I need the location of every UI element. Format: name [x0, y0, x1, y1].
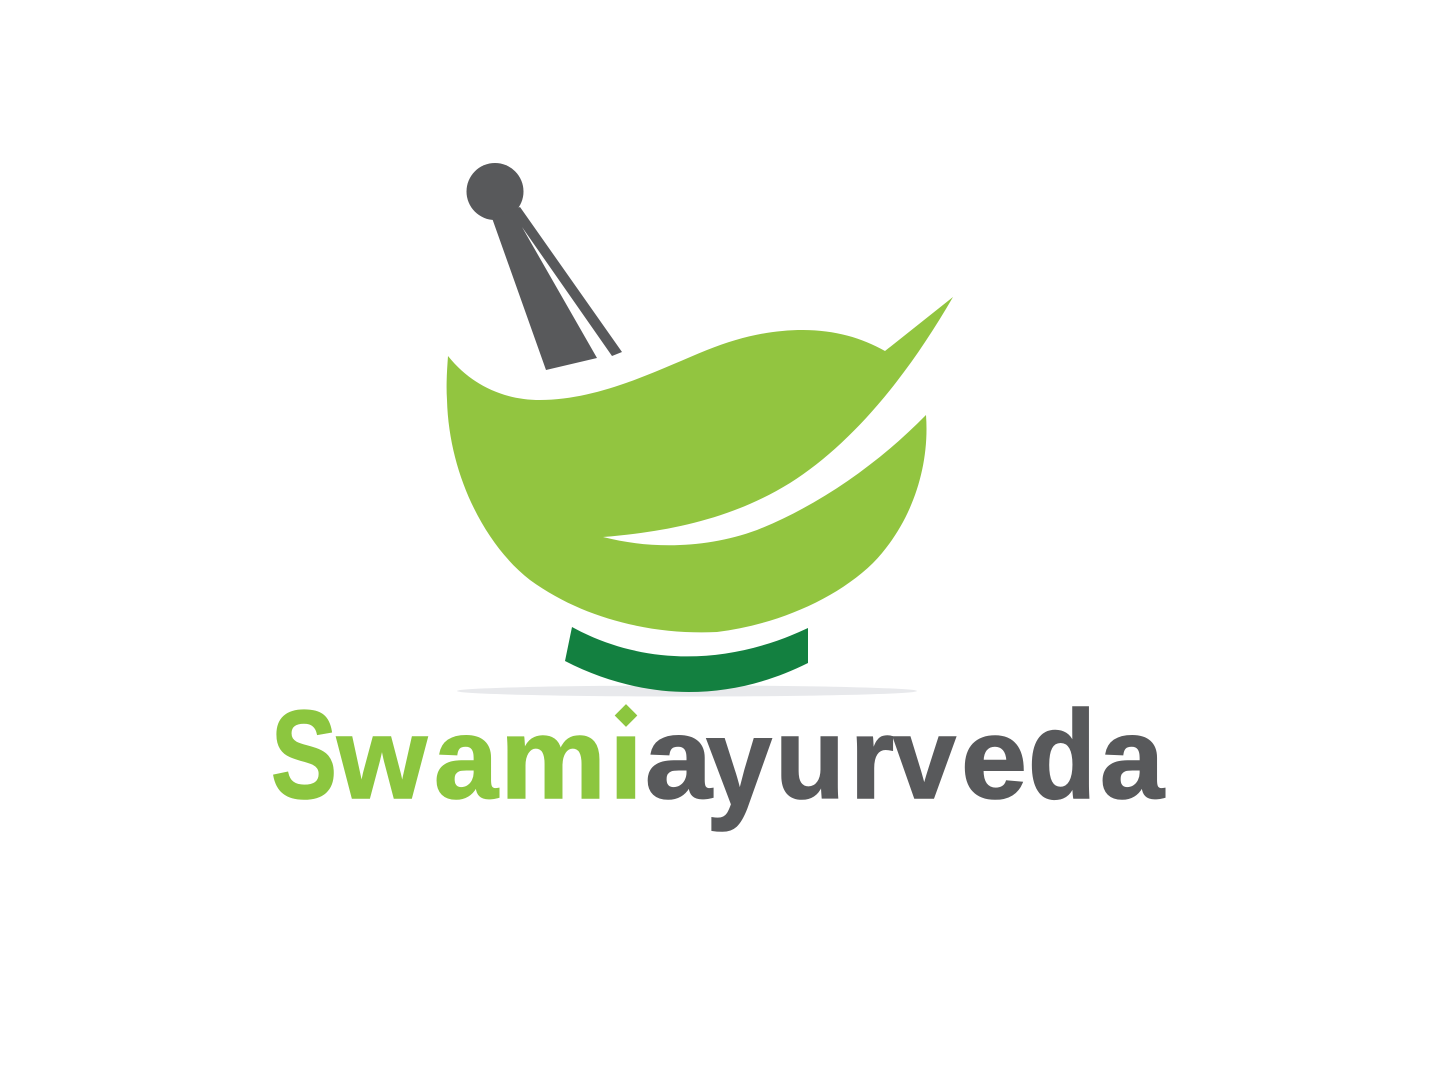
wordmark: ayurveda: e — [961, 695, 1027, 823]
wordmark: ayurveda: v — [893, 695, 956, 823]
wordmark: Swami: S — [271, 686, 337, 825]
wordmark: Swami — [271, 686, 644, 825]
wordmark: ayurveda: a — [645, 695, 713, 823]
icon: mortar base — [565, 627, 808, 692]
wordmark: ayurveda — [645, 686, 1165, 832]
wordmark: ayurveda: a — [1100, 695, 1165, 823]
wordmark: ayurveda: y — [706, 693, 772, 832]
icon: leaf mortar bowl — [447, 297, 953, 632]
wordmark: Swami: w — [336, 695, 428, 823]
wordmark: ayurveda: d — [1028, 686, 1096, 825]
wordmark: Swami: i — [609, 695, 643, 823]
wordmark: ayurveda: r — [850, 695, 894, 823]
wordmark: Swami: m — [500, 695, 606, 823]
wordmark — [271, 686, 1165, 832]
wordmark: Swami: a — [434, 695, 499, 823]
wordmark: ayurveda: u — [775, 695, 845, 823]
shadow ellipse — [457, 686, 917, 696]
icon: pestle — [466, 163, 622, 370]
